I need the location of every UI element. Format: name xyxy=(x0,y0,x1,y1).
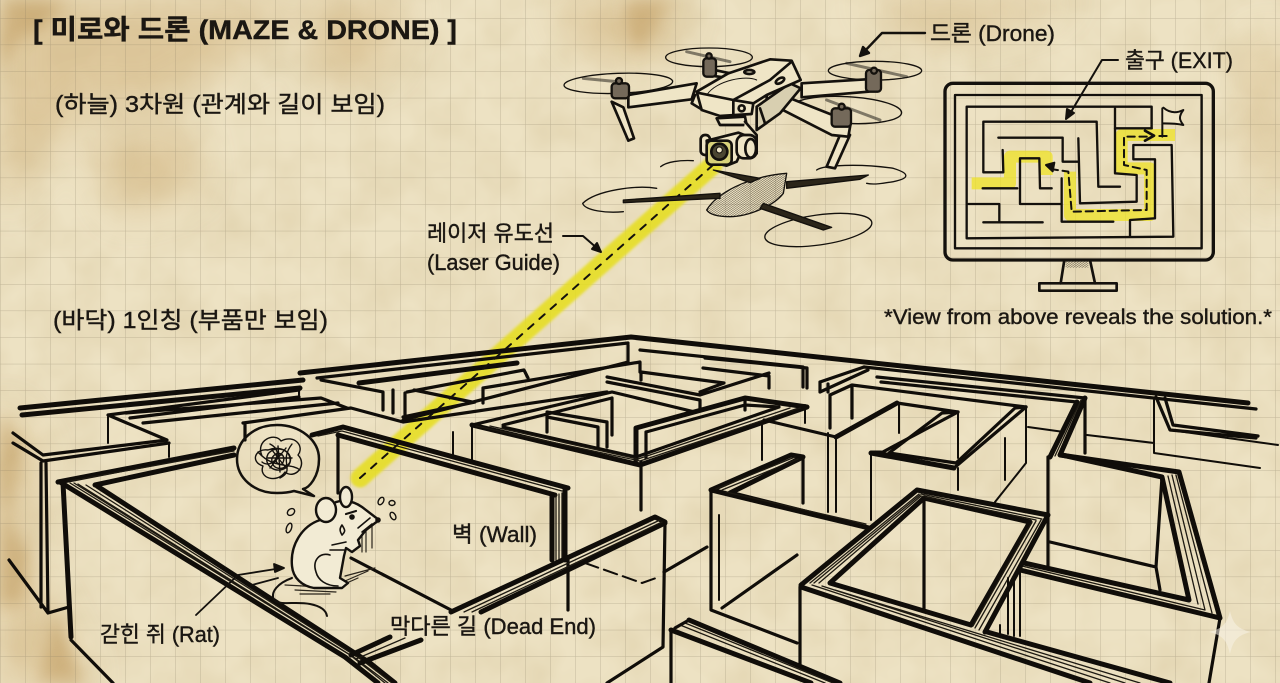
label: rat: 갇힌 쥐 (Rat) xyxy=(100,622,220,647)
label: laser guide xyxy=(427,221,560,275)
monitor stand xyxy=(1039,260,1117,291)
wall: far left xyxy=(9,390,607,613)
drone arms and legs xyxy=(612,68,868,168)
callout arrow: rat xyxy=(196,564,284,615)
solution highlight xyxy=(972,135,1175,215)
label: wall: 벽 (Wall) xyxy=(452,522,537,547)
laser guide beam xyxy=(360,165,713,478)
title: [ 미로와 드론 (MAZE & DRONE) ] xyxy=(33,15,457,45)
drone body xyxy=(692,59,801,130)
camera gimbal xyxy=(701,122,757,166)
text: ground view: (바닥) 1인칭 (부품만 보임) xyxy=(53,307,328,333)
laser dashed line xyxy=(360,165,713,478)
maze xyxy=(9,337,1278,683)
wall: centre block xyxy=(453,377,1085,520)
speech bubble with tangled thoughts xyxy=(237,425,319,496)
callout arrow: drone xyxy=(860,33,925,56)
tangled scribble xyxy=(255,437,302,479)
wall: back perimeter xyxy=(20,337,1256,420)
drone xyxy=(564,48,922,252)
label: drone: 드론 (Drone) xyxy=(930,21,1055,46)
sparkle mark xyxy=(1209,611,1251,654)
label: laser guide: 레이저 유도선 xyxy=(427,221,554,246)
note: view from above: *View from above reveals the solution.* xyxy=(884,306,1272,329)
text: sky view: (하늘) 3차원 (관계와 길이 보임) xyxy=(55,91,385,117)
maze walls xyxy=(967,107,1173,238)
label: exit: 출구 (EXIT) xyxy=(1125,48,1233,73)
callout arrow: laser guide xyxy=(563,236,601,252)
rat ears xyxy=(316,498,336,522)
wall: rat room xyxy=(58,427,568,683)
wall: right side xyxy=(1020,397,1278,683)
rat far ear xyxy=(340,487,352,507)
rat xyxy=(273,487,397,616)
sweat drops xyxy=(285,496,397,534)
monitor with overhead maze xyxy=(945,83,1213,291)
label: dead end: 막다른 길 (Dead End) xyxy=(390,614,596,639)
rat floor shadow xyxy=(285,505,375,594)
wall: dead end xyxy=(351,517,665,683)
rat face xyxy=(315,511,380,586)
rat tail xyxy=(273,578,327,616)
wall: front blocks xyxy=(664,455,1170,683)
callout arrow: exit xyxy=(1066,60,1118,119)
monitor frame xyxy=(945,83,1213,260)
rat body xyxy=(292,501,379,588)
propellers xyxy=(564,48,922,126)
flag xyxy=(1159,108,1183,137)
drone shadow xyxy=(583,161,906,252)
motors xyxy=(612,53,881,127)
label: laser guide: (Laser Guide) xyxy=(427,250,560,275)
solution dashed path xyxy=(1046,131,1154,212)
